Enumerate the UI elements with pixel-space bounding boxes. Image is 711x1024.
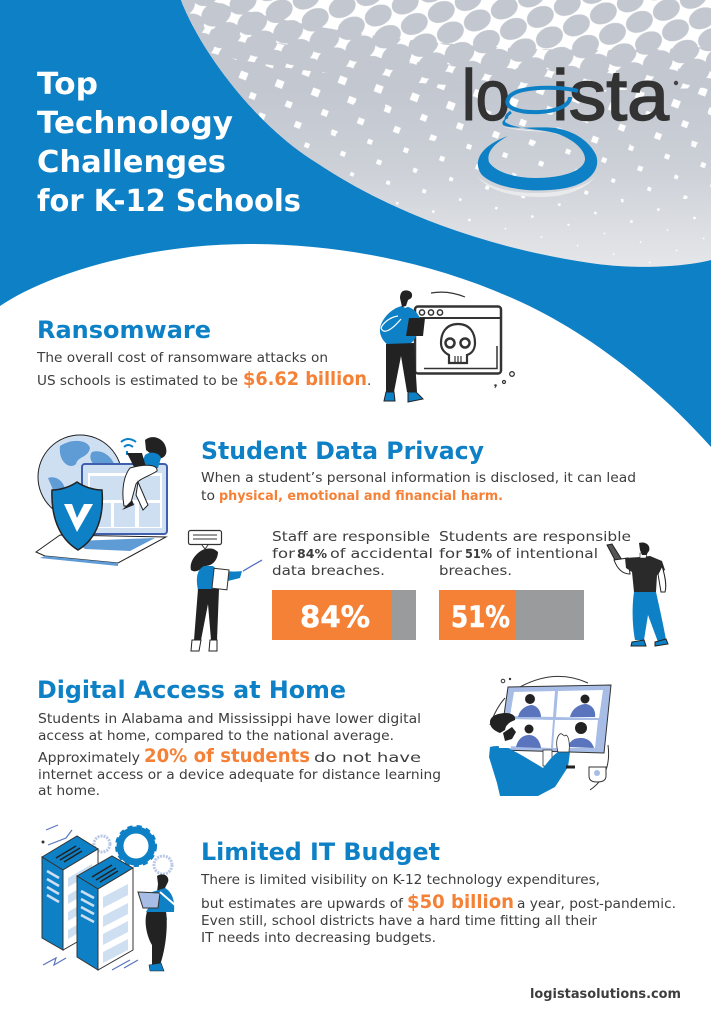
- text: students responsible: Students are responsible: [439, 529, 631, 545]
- header halftone sphere: [181, 0, 711, 267]
- text: budget body: but estimates are upwards of: [201, 896, 404, 912]
- title: [37, 67, 301, 219]
- text: digital access body: Students in Alabama and Mississippi have lower digital: [38, 711, 421, 727]
- illustration: server racks with engineer: [42, 825, 175, 971]
- text: staff responsible: of accidental: [330, 546, 433, 562]
- text: budget body: There is limited visibility on K-12 technology expenditures,: [200, 872, 600, 888]
- heading: Limited IT Budget: Limited IT Budget: [201, 838, 440, 866]
- section: Ransomware: [36, 316, 371, 390]
- text: digital access body: 20% of students: [144, 745, 310, 767]
- text: staff responsible: for: [272, 546, 296, 562]
- heading: Digital Access at Home: Digital Access at Home: [37, 676, 346, 704]
- footer url: logistasolutions.com: [530, 986, 681, 1002]
- text: privacy intro: to: [201, 488, 215, 504]
- text: budget body: [200, 872, 676, 946]
- section: Student Data Privacy: [201, 437, 636, 504]
- text: digital access body: Approximately: [38, 750, 140, 766]
- logo: logista: [462, 57, 678, 197]
- text: students responsible: [439, 529, 631, 579]
- illustration: man writing with marker: [607, 542, 668, 646]
- title: Top: [37, 67, 98, 102]
- engineer with tablet: [138, 874, 175, 971]
- illustration: woman presenting with pointer: [188, 530, 262, 651]
- heading: Student Data Privacy: Student Data Privacy: [201, 437, 484, 465]
- text: budget body: IT needs into decreasing budgets.: [201, 930, 436, 946]
- text: ransomware cost: The overall cost of ransomware attacks on: [36, 350, 328, 366]
- text: privacy intro: physical, emotional and financial harm.: [219, 488, 503, 504]
- section: Digital Access at Home: [37, 676, 441, 799]
- illustration: man and skull browser window: [380, 290, 514, 402]
- logo: logista: lo: [462, 57, 510, 136]
- text: budget body: a year, post-pandemic.: [517, 896, 676, 912]
- text: privacy intro: When a student’s personal information is disclosed, it can lead: [201, 470, 636, 486]
- text: digital access body: [38, 711, 441, 799]
- text: students responsible: breaches.: [439, 563, 512, 579]
- illustration: man on video call: [489, 676, 611, 796]
- text: students responsible: of intentional: [496, 546, 598, 562]
- text: digital access body: at home.: [38, 783, 100, 799]
- text: staff responsible: [272, 529, 433, 579]
- server rack one: [42, 836, 98, 950]
- text: budget body: $50 billion: [407, 891, 514, 913]
- icon: blue gear: [117, 827, 155, 865]
- title: Technology: [37, 106, 233, 141]
- title: for K-12 Schools: [37, 184, 301, 219]
- text: budget body: Even still, school districts have a hard time fitting all their: [201, 913, 597, 929]
- text: ransomware cost: .: [367, 373, 371, 389]
- text: staff responsible: 84%: [297, 546, 327, 561]
- stat: students 51 percent: [439, 529, 631, 640]
- bar: 51 percent: 51%: [451, 600, 510, 634]
- text: staff responsible: Staff are responsible: [272, 529, 430, 545]
- bar: 84 percent: [272, 590, 416, 640]
- text: digital access body: do not have: [314, 750, 421, 766]
- text: digital access body: internet access or a device adequate for distance learning: [38, 767, 441, 783]
- stat: staff 84 percent: [272, 529, 433, 640]
- text: digital access body: access at home, compared to the national average.: [38, 728, 394, 744]
- bar: 84 percent: 84%: [300, 600, 370, 634]
- title: Challenges: [37, 145, 226, 180]
- illustration: globe, laptop and shield: [36, 435, 167, 566]
- text: staff responsible: data breaches.: [272, 563, 385, 579]
- text: privacy intro: [201, 470, 636, 504]
- logo: logista: ista: [552, 57, 670, 136]
- section: Limited IT Budget: [200, 838, 676, 946]
- text: students responsible: 51%: [465, 546, 492, 561]
- text: ransomware cost: $6.62 billion: [243, 368, 367, 390]
- server rack two: [77, 856, 133, 970]
- heading: Ransomware: Ransomware: [37, 316, 211, 344]
- text: ransomware cost: [36, 350, 371, 390]
- bar: 51 percent: [439, 590, 584, 640]
- text: ransomware cost: US schools is estimated to be: [37, 373, 238, 389]
- text: students responsible: for: [439, 546, 463, 562]
